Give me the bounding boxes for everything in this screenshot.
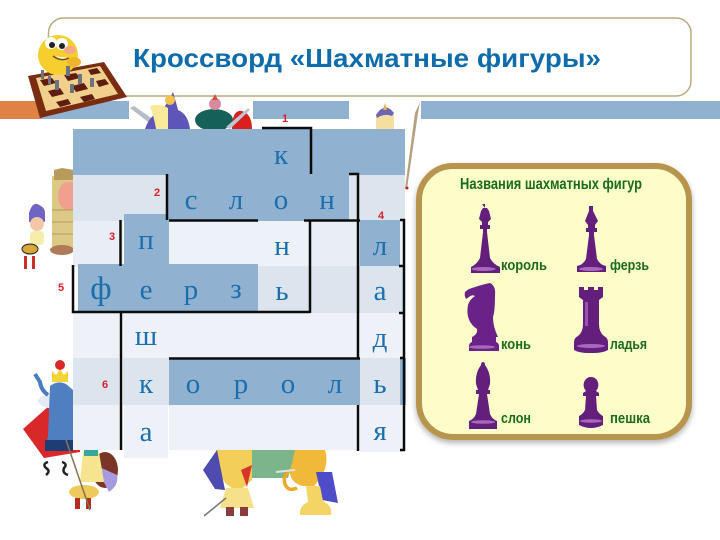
crossword letters: з xyxy=(230,273,242,305)
crossword letters: р xyxy=(234,368,248,400)
crossword letters: л xyxy=(373,230,387,262)
crossword letters: а xyxy=(140,416,153,448)
crossword letters: д xyxy=(373,322,388,354)
crossword letters: р xyxy=(184,274,198,306)
label: слон xyxy=(501,410,531,427)
clue numbers: 3 xyxy=(109,231,115,243)
crossword letters: о xyxy=(274,184,288,216)
title: Кроссворд «Шахматные фигуры» xyxy=(133,43,601,73)
illustration: red and green character xyxy=(195,94,252,131)
crossword letters: о xyxy=(281,368,295,400)
crossword letters: е xyxy=(140,274,152,306)
grid black lines xyxy=(73,128,404,451)
crossword letters: я xyxy=(373,415,387,447)
piece: pawn xyxy=(579,377,651,428)
label: knight: конь xyxy=(501,336,531,353)
crossword letters: ь xyxy=(275,275,289,307)
clue numbers: 6 xyxy=(102,379,108,391)
crossword letters: а xyxy=(374,275,387,307)
clue numbers: 5 xyxy=(58,282,64,294)
illustration: small helmeted character xyxy=(22,204,45,269)
illustration: knight and elephant figures xyxy=(203,450,338,516)
illustration: castle character xyxy=(50,168,74,255)
crossword letters: п xyxy=(138,224,154,256)
illustration: pawn spearman xyxy=(66,440,118,510)
crossword grid xyxy=(58,113,406,458)
crossword letters: л xyxy=(328,368,342,400)
piece: bishop xyxy=(469,362,531,429)
icon: smiley playing chess xyxy=(28,35,127,118)
piece: queen xyxy=(577,206,649,274)
clue numbers: 2 xyxy=(154,187,160,199)
illustration: guard with spear xyxy=(376,102,420,190)
crossword letters: л xyxy=(229,184,243,216)
label: король xyxy=(501,257,547,274)
crossword letters xyxy=(90,139,388,448)
crossword letters: н xyxy=(274,230,290,262)
piece: knight xyxy=(465,283,499,351)
crossword letters: к xyxy=(139,368,154,400)
label: пешка xyxy=(610,410,651,427)
clue numbers: 4 xyxy=(378,210,385,222)
crossword letters: ь xyxy=(373,368,387,400)
label: ладья xyxy=(610,336,647,353)
crossword letters: о xyxy=(186,368,200,400)
crossword letters: н xyxy=(319,184,335,216)
title panel xyxy=(48,18,691,96)
grid cell fills xyxy=(73,129,406,458)
illustration: blue king character xyxy=(23,360,80,475)
panel: chess piece names xyxy=(419,166,689,437)
crossword letters: с xyxy=(185,184,197,216)
clue numbers: 1 xyxy=(282,113,288,125)
piece: king xyxy=(471,204,547,274)
clue numbers xyxy=(58,113,385,391)
crossword letters: ш xyxy=(135,320,157,352)
crossword letters: к xyxy=(274,139,289,171)
illustration: purple knight character xyxy=(130,92,190,129)
label: ферзь xyxy=(610,257,649,274)
crossword letters: ф xyxy=(90,271,112,307)
header band xyxy=(0,101,720,119)
piece: rook xyxy=(574,287,647,353)
panel heading: Названия шахматных фигур xyxy=(460,176,642,193)
